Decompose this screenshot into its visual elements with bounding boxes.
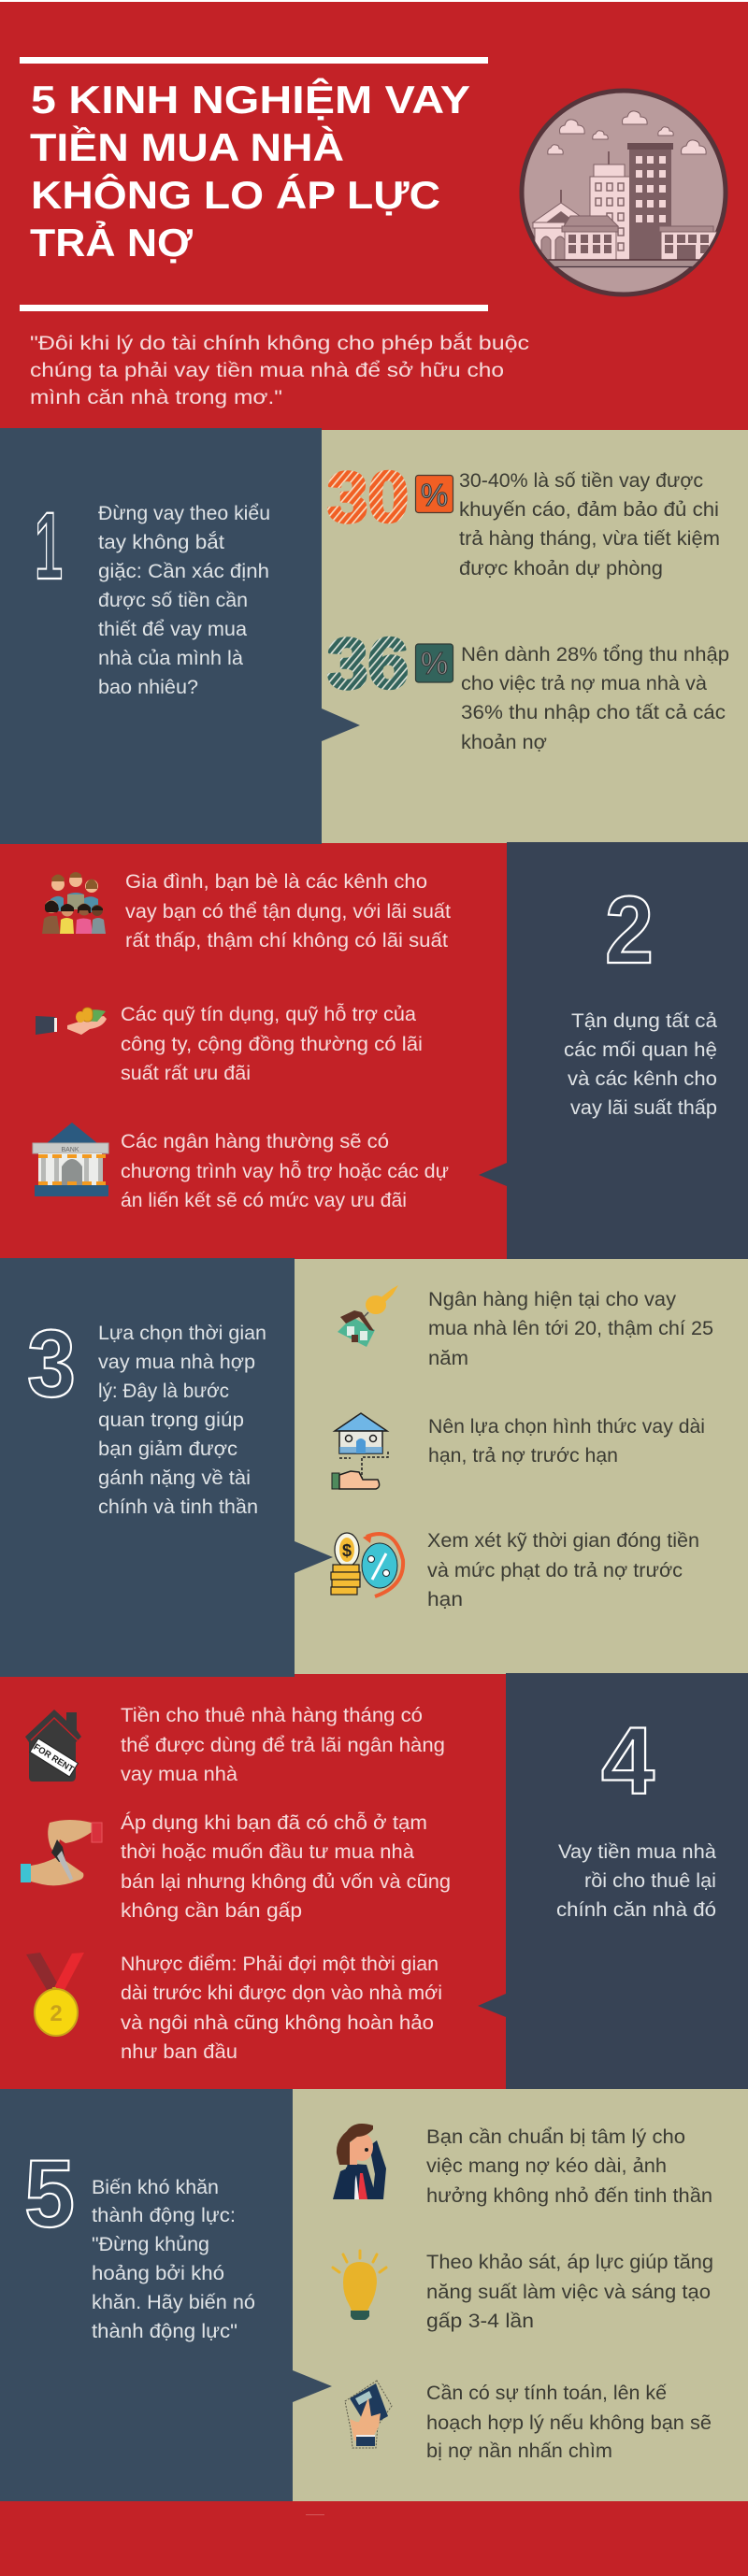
quote: chúng ta phải vay tiền mua nhà để sở hữu cho	[30, 360, 504, 381]
text: penalty	[427, 1530, 699, 1610]
section 3 number: 3	[27, 1310, 76, 1417]
text: apply when: thời hoặc muốn đầu tư mua nhà	[121, 1841, 414, 1863]
text: loan term: năm	[428, 1348, 468, 1369]
panel: section 2 background	[0, 842, 748, 1259]
quote: mình căn nhà trong mơ."	[30, 387, 282, 408]
section 4 main text: chính căn nhà đó	[556, 1899, 716, 1921]
text: rental income	[121, 1705, 445, 1785]
text: 30 percent	[459, 470, 720, 580]
text: 36 percent: cho việc trả nợ mua nhà và	[461, 673, 707, 694]
text: credit funds: suất rất ưu đãi	[121, 1063, 251, 1084]
panel: header	[20, 57, 729, 408]
quote	[30, 333, 529, 408]
icon: bank: BANK	[61, 1147, 79, 1153]
icon: house over hand	[332, 1413, 388, 1489]
title	[30, 77, 470, 265]
text: mental preparation: việc mang nợ kéo dài, ảnh	[426, 2155, 667, 2177]
text: plan	[426, 2383, 712, 2462]
section 2 main text: và các kênh cho	[568, 1068, 717, 1090]
stat: 30 percent: %	[421, 478, 448, 512]
section 1 main text: nhà của mình là	[98, 648, 243, 669]
icon: medal: 2	[50, 2001, 63, 2026]
icon: coins and percent	[331, 1533, 403, 1596]
text: penalty: hạn	[427, 1589, 463, 1610]
text: drawbacks	[121, 1953, 442, 2063]
text: 30 percent: trả hàng tháng, vừa tiết kiệm	[459, 528, 720, 550]
text: rental income: Tiền cho thuê nhà hàng tháng có	[121, 1705, 423, 1726]
stat: 36 percent: 36	[327, 624, 409, 704]
text: rental income: thể được dùng để trả lãi ngân hàng	[121, 1735, 445, 1756]
section 5 main text: thành động lực"	[92, 2321, 237, 2342]
icon: bank	[33, 1123, 108, 1196]
section 5 main text: "Đừng khủng	[92, 2234, 209, 2255]
icon: coins and percent: $	[342, 1541, 352, 1560]
text: banks: Các ngân hàng thường sẽ có	[121, 1131, 389, 1152]
text: family: Gia đình, bạn bè là các kênh cho	[125, 871, 427, 893]
section 4 main text: rồi cho thuê lại	[584, 1870, 716, 1892]
icon: medal	[26, 1953, 84, 2036]
section 1 main text: giặc: Cần xác định	[98, 561, 269, 582]
stat: 30 percent	[327, 458, 453, 537]
section 5 number: 5	[24, 2140, 75, 2247]
title: TRẢ NỢ	[30, 220, 193, 265]
text: credit funds	[121, 1004, 423, 1084]
text: survey: Theo khảo sát, áp lực giúp tăng	[426, 2252, 713, 2273]
text: apply when	[121, 1812, 451, 1922]
text: banks: chương trình vay hỗ trợ hoặc các dự	[121, 1161, 449, 1182]
section 5 main text: hoảng bởi khó	[92, 2263, 224, 2284]
section 4 main text	[556, 1841, 716, 1921]
text: apply when: Áp dụng khi bạn đã có chỗ ở tạm	[121, 1812, 427, 1834]
section 1 main text: Đừng vay theo kiểu	[98, 503, 270, 524]
text: penalty: Xem xét kỹ thời gian đóng tiền	[427, 1530, 699, 1552]
text: family	[125, 871, 451, 952]
icon: light bulb	[333, 2251, 386, 2320]
section 3 main text: vay mua nhà hợp	[98, 1352, 255, 1373]
text: mental preparation	[426, 2126, 712, 2207]
text: mental preparation: hưởng không nhỏ đến tinh thần	[426, 2185, 712, 2207]
section 1 number: 1	[35, 493, 63, 599]
section 3 main text: lý: Đây là bước	[98, 1381, 229, 1402]
icon: hand and calculator	[345, 2381, 392, 2448]
text: loan term: mua nhà lên tới 20, thậm chí 25	[428, 1318, 713, 1339]
text: 36 percent: Nên dành 28% tổng thu nhập	[461, 644, 729, 665]
panel: section 4 background	[0, 1673, 748, 2090]
section 2 main text: các mối quan hệ	[564, 1039, 717, 1061]
footer band	[0, 2501, 748, 2576]
text: 36 percent	[461, 644, 729, 753]
section 1 main text: tay không bắt	[98, 532, 224, 553]
section 2 number: 2	[605, 877, 654, 983]
text: penalty: và mức phạt do trả nợ trước	[427, 1560, 683, 1581]
section 4 number: 4	[601, 1708, 654, 1814]
stat: 30 percent: 30	[327, 458, 409, 537]
panel: section 5 background	[0, 2089, 748, 2501]
text: banks	[121, 1131, 449, 1211]
text: 30 percent: được khoản dự phòng	[459, 558, 663, 580]
top rule	[20, 57, 488, 64]
section 1 main text: bao nhiêu?	[98, 677, 198, 698]
title: 5 KINH NGHIỆM VAY	[31, 77, 470, 122]
panel: section 3 background	[0, 1258, 748, 1677]
section 3 main text: chính và tinh thần	[98, 1496, 258, 1518]
icon: house key	[338, 1285, 398, 1347]
icon: stressed woman	[333, 2124, 386, 2199]
icon: city in a circle	[519, 91, 729, 294]
bottom rule	[20, 305, 488, 311]
icon: house for rent: FOR RENT	[32, 1742, 76, 1775]
text: loan term	[428, 1289, 713, 1369]
section 3 main text: bạn giảm được	[98, 1438, 237, 1460]
text: banks: án liến kết sẽ có mức vay ưu đãi	[121, 1190, 407, 1211]
text: long-term loan: hạn, trả nợ trước hạn	[428, 1445, 618, 1467]
title: TIỀN MUA NHÀ	[30, 125, 344, 169]
section 2 main text: Tận dụng tất cả	[571, 1010, 717, 1032]
section 1 main text: thiết để vay mua	[98, 619, 247, 640]
text: plan: hoạch hợp lý nếu không bạn sẽ	[426, 2412, 712, 2434]
text: survey	[426, 2252, 713, 2332]
title: KHÔNG LO ÁP LỰC	[31, 172, 440, 217]
text: 30 percent: 30-40% là số tiền vay được	[459, 470, 703, 492]
quote: "Đôi khi lý do tài chính không cho phép bắt buộc	[30, 333, 529, 354]
text: plan: bị nợ nần nhấn chìm	[426, 2440, 612, 2462]
section 1 main text: được số tiền cần	[98, 590, 248, 611]
section 3 main text: quan trọng giúp	[98, 1410, 244, 1431]
text: apply when: bán lại nhưng không đủ vốn và cũng	[121, 1871, 451, 1893]
stat: 36 percent: %	[421, 646, 448, 680]
text: long-term loan: Nên lựa chọn hình thức vay dài	[428, 1416, 705, 1438]
text: credit funds: Các quỹ tín dụng, quỹ hỗ trợ của	[121, 1004, 416, 1025]
text: credit funds: công ty, cộng đồng thường có lãi	[121, 1034, 423, 1055]
section 2 main text	[564, 1010, 717, 1119]
text: apply when: không cần bán gấp	[121, 1900, 302, 1922]
text: plan: Cần có sự tính toán, lên kế	[426, 2383, 667, 2404]
text: drawbacks: và ngôi nhà cũng không hoàn hảo	[121, 2012, 434, 2034]
section 5 main text: Biến khó khăn	[92, 2177, 219, 2198]
icon: family group	[42, 872, 106, 934]
section 3 main text	[98, 1323, 266, 1518]
section 3 main text: gánh nặng về tài	[98, 1467, 251, 1489]
text: survey: gấp 3-4 lần	[426, 2311, 534, 2332]
icon: hand with coins	[36, 1008, 107, 1035]
text: drawbacks: như ban đầu	[121, 2041, 237, 2063]
text: 36 percent: 36% thu nhập cho tất cả các	[461, 702, 726, 723]
text: family: vay bạn có thể tận dụng, với lãi suất	[125, 901, 451, 923]
section 1 main text	[98, 503, 270, 698]
section 3 main text: Lựa chọn thời gian	[98, 1323, 266, 1344]
text: drawbacks: dài trước khi được dọn vào nhà mới	[121, 1982, 442, 2004]
text: survey: năng suất làm việc và sáng tạo	[426, 2282, 711, 2303]
section 5 main text: khăn. Hãy biến nó	[92, 2292, 255, 2313]
panel: section 1 background	[0, 428, 748, 844]
icon: hands passing keys	[21, 1820, 102, 1885]
text: long-term loan	[428, 1416, 705, 1467]
text: 36 percent: khoản nợ	[461, 732, 547, 753]
section 4 main text: Vay tiền mua nhà	[558, 1841, 716, 1863]
section 5 main text: thành động lực:	[92, 2205, 236, 2226]
text: drawbacks: Nhược điểm: Phải đợi một thời gian	[121, 1953, 439, 1975]
text: rental income: vay mua nhà	[121, 1764, 237, 1785]
text: family: rất thấp, thậm chí không có lãi suất	[125, 930, 448, 952]
text: mental preparation: Bạn cần chuẩn bị tâm lý cho	[426, 2126, 685, 2148]
text: loan term: Ngân hàng hiện tại cho vay	[428, 1289, 677, 1310]
icon: house for rent	[25, 1710, 81, 1782]
section 2 main text: vay lãi suất thấp	[570, 1097, 717, 1119]
stat: 36 percent	[327, 624, 453, 704]
section 5 main text	[92, 2177, 255, 2342]
text: 30 percent: khuyến cáo, đảm bảo đủ chi	[459, 499, 719, 521]
